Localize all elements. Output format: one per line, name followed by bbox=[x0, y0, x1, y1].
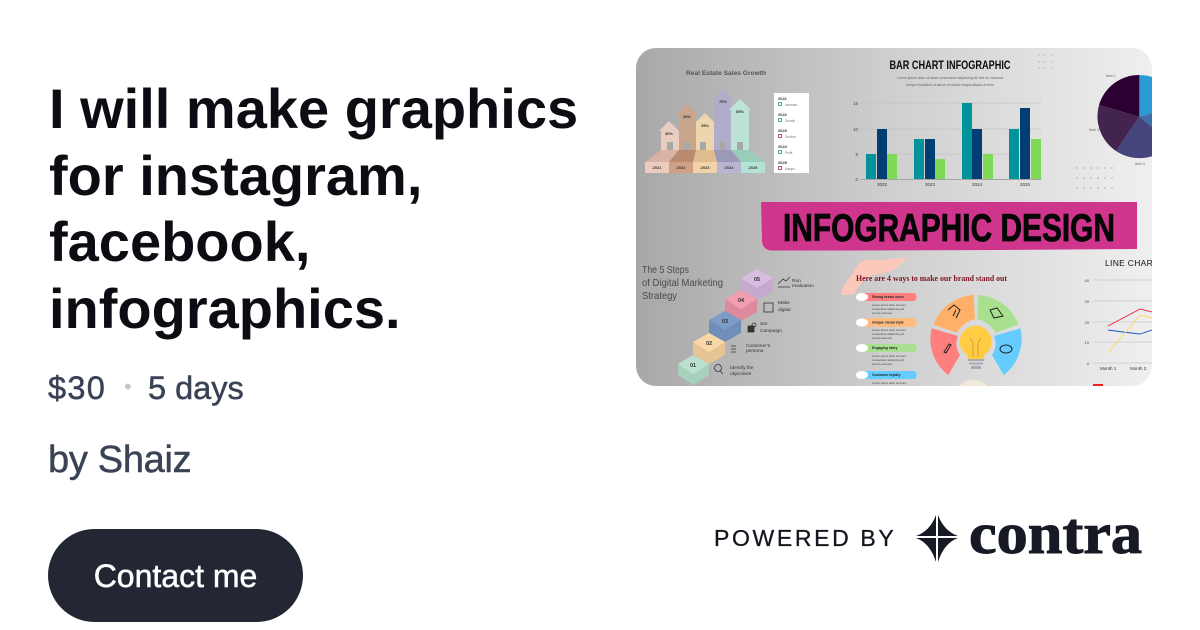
step captions: Identify the bbox=[730, 365, 754, 371]
project preview image bbox=[636, 48, 1152, 386]
legend: sales years: 2025 bbox=[778, 160, 788, 165]
legend: sales years: Growth bbox=[785, 119, 796, 123]
panel: real estate sales growth: 2021 bbox=[653, 165, 662, 170]
list pills: consectetur adipiscing elit bbox=[872, 332, 904, 336]
title: for instagram, bbox=[49, 144, 422, 207]
step 5 cube bbox=[741, 269, 773, 300]
panel: real estate sales growth bbox=[645, 70, 766, 173]
panel: real estate sales growth: 70% bbox=[719, 99, 727, 104]
line chart: Month 2 bbox=[1130, 366, 1147, 371]
panel: real estate sales growth: 2025 bbox=[749, 165, 758, 170]
heading: Here are 4 ways to make our brand stand out bbox=[856, 274, 1007, 283]
step icons bbox=[714, 277, 790, 374]
pie chart: Item 4 bbox=[1089, 128, 1099, 132]
cream circle bbox=[959, 380, 987, 386]
title bbox=[49, 77, 578, 340]
line chart: 10 bbox=[1085, 340, 1090, 345]
list pills bbox=[856, 293, 917, 385]
line chart: 30 bbox=[1085, 299, 1090, 304]
steps heading: Strategy bbox=[642, 290, 678, 302]
list pills: Lorem ipsum dolor sit amet bbox=[872, 381, 906, 385]
panel: real estate sales growth: 2023 bbox=[701, 165, 710, 170]
step captions: persona bbox=[746, 348, 764, 354]
list pills: Lorem ipsum dolor sit amet bbox=[872, 354, 906, 358]
step 5 cube: 05 bbox=[754, 277, 760, 283]
panel: 4 ways to stand out bbox=[841, 258, 1022, 386]
bar chart infographic: 15 bbox=[853, 101, 858, 106]
panel: real estate sales growth: 35% bbox=[701, 123, 709, 128]
author byline: by Shaiz bbox=[48, 439, 191, 481]
price and delivery time: $30 bbox=[48, 370, 106, 406]
legend: sales years: 2023 bbox=[778, 128, 788, 133]
list pills: Engaging story bbox=[872, 346, 898, 350]
step 3 cube bbox=[709, 311, 741, 342]
price and delivery time: • bbox=[124, 374, 132, 399]
step captions: Customer's bbox=[746, 343, 771, 349]
line chart: 40 bbox=[1085, 278, 1090, 283]
step captions: Make bbox=[778, 300, 790, 306]
bar chart infographic: 5 bbox=[855, 152, 858, 157]
step captions: Campaign bbox=[760, 328, 782, 334]
panel: real estate sales growth: 40% bbox=[683, 114, 691, 119]
step 2 cube: 02 bbox=[706, 341, 712, 347]
step 4 cube bbox=[725, 290, 757, 321]
step captions bbox=[730, 278, 814, 377]
four segment diagram bbox=[930, 295, 1022, 375]
title: I will make graphics bbox=[49, 77, 578, 140]
list pills: sed do eiusmod bbox=[872, 336, 892, 340]
step captions: Set bbox=[760, 321, 768, 327]
legend: sales years: Decline bbox=[785, 135, 796, 139]
powered by label: POWERED BY bbox=[714, 525, 896, 551]
bar chart infographic: tempor incididunt ut labore et dolore magna aliqua ut enim bbox=[906, 83, 994, 87]
title: facebook, bbox=[49, 210, 310, 273]
list pills: sed do eiusmod bbox=[872, 311, 892, 315]
bar chart infographic: 2024 bbox=[972, 182, 983, 187]
line chart bbox=[1084, 260, 1152, 386]
contact button bbox=[48, 529, 303, 622]
contact button: Contact me bbox=[94, 558, 257, 594]
list pills: sed do eiusmod bbox=[872, 362, 892, 366]
bar chart infographic: 2023 bbox=[925, 182, 936, 187]
pink blob bbox=[841, 258, 907, 295]
bar chart heading: BAR CHART INFOGRAPHIC bbox=[890, 60, 1010, 72]
panel: real estate sales growth: 2024 bbox=[725, 165, 734, 170]
bar chart infographic: 2022 bbox=[877, 182, 888, 187]
panel: real estate sales growth: 55% bbox=[736, 109, 744, 114]
step 4 cube: 04 bbox=[738, 298, 745, 304]
panel: 5 steps of digital marketing bbox=[642, 264, 814, 385]
line chart: 0 bbox=[1087, 361, 1090, 366]
line chart: 20 bbox=[1085, 320, 1090, 325]
steps heading: of Digital Marketing bbox=[642, 277, 723, 289]
steps heading bbox=[642, 264, 723, 302]
step 1 cube: 01 bbox=[690, 363, 696, 369]
step 1 cube bbox=[678, 355, 709, 385]
title: infographics. bbox=[49, 277, 401, 340]
bar chart infographic: 10 bbox=[853, 127, 858, 132]
bar chart infographic: 2025 bbox=[1020, 182, 1031, 187]
list pills: Unique visual style bbox=[872, 320, 904, 324]
step 3 cube: 03 bbox=[722, 319, 728, 325]
bar chart infographic: Lorem ipsum dolor sit amet consectetur adipiscing elit sed do eiusmod bbox=[897, 76, 1003, 80]
line chart: Month 1 bbox=[1100, 366, 1117, 371]
step captions: Run bbox=[792, 278, 801, 284]
light bulb bbox=[960, 326, 992, 369]
dot grid bbox=[1076, 168, 1112, 188]
list pills: Lorem ipsum dolor sit amet bbox=[872, 303, 906, 307]
step captions: objectives bbox=[730, 371, 752, 377]
legend: sales years: 2022 bbox=[778, 112, 788, 117]
legend: sales years: Increase bbox=[785, 103, 797, 107]
legend: sales years: 2021 bbox=[778, 96, 788, 101]
legend: sales years: Margin bbox=[785, 167, 795, 171]
list pills: consectetur adipiscing elit bbox=[872, 358, 904, 362]
list pills: Customer loyalty bbox=[872, 373, 900, 377]
pie chart bbox=[1089, 74, 1152, 165]
list pills: Lorem ipsum dolor sit amet bbox=[872, 328, 906, 332]
price and delivery time: 5 days bbox=[148, 370, 244, 406]
step 2 cube bbox=[693, 333, 725, 364]
steps heading: The 5 Steps bbox=[642, 264, 689, 276]
legend: sales years: Profit bbox=[785, 151, 793, 155]
step captions: digital bbox=[778, 307, 791, 313]
icon: contra star bbox=[916, 515, 958, 562]
list pills: consectetur adipiscing elit bbox=[872, 307, 904, 311]
pie chart: Item 1 bbox=[1106, 74, 1116, 78]
panel: real estate sales growth: 2022 bbox=[677, 165, 686, 170]
list pills: Strong brand voice bbox=[872, 295, 904, 299]
bar chart infographic bbox=[853, 54, 1052, 187]
bar chart infographic: 0 bbox=[855, 177, 858, 182]
contra logo bbox=[916, 510, 1142, 566]
panel: real estate sales growth: 30% bbox=[665, 131, 673, 136]
legend: sales years: 2024 bbox=[778, 144, 788, 149]
pie chart: Item 3 bbox=[1135, 162, 1145, 166]
legend: sales years bbox=[774, 93, 809, 173]
panel: real estate sales growth: Real Estate Sales Growth bbox=[686, 70, 766, 77]
step captions: evaluation bbox=[792, 283, 814, 289]
price and delivery time bbox=[48, 370, 244, 406]
